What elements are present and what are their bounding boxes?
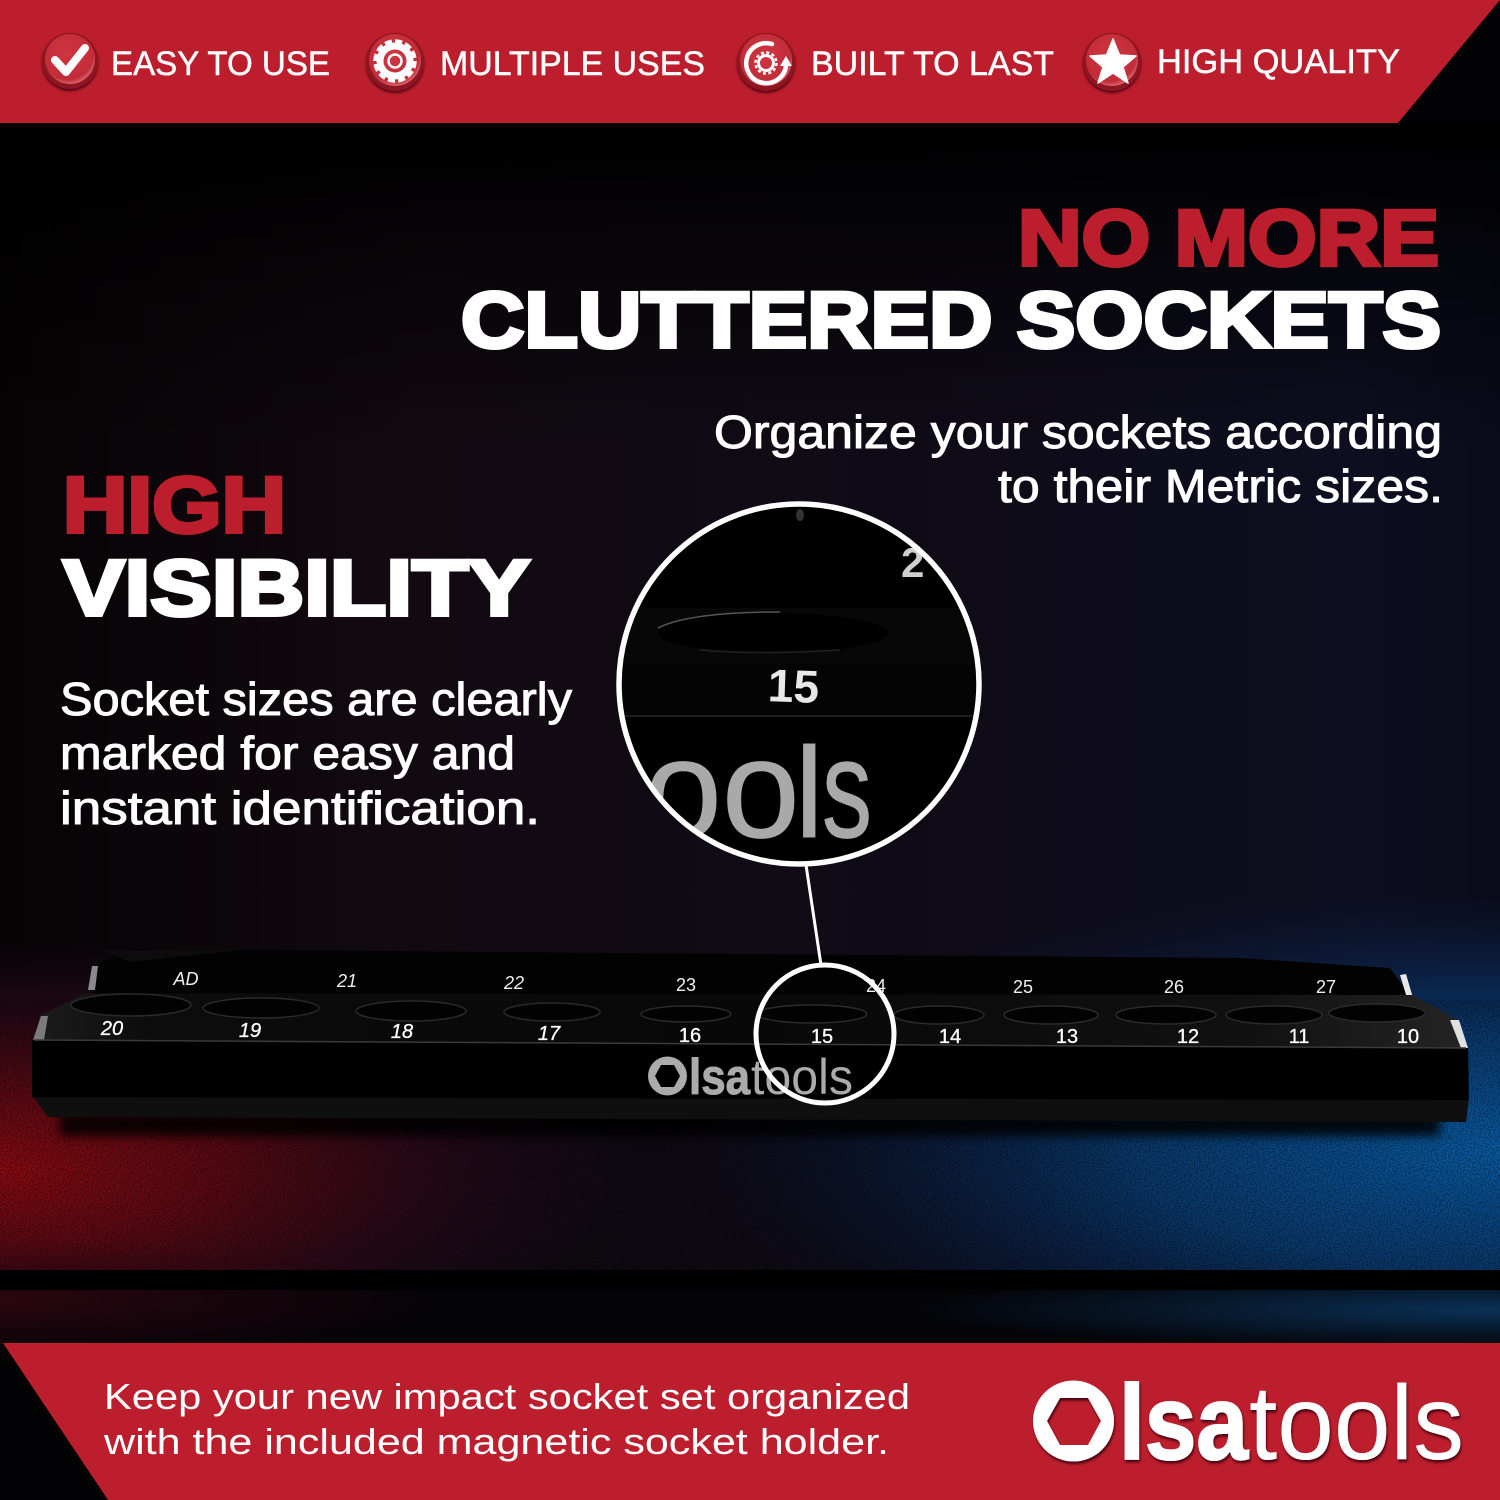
holder logo: lsa bbox=[689, 1049, 751, 1105]
rear row size numbers: 25 bbox=[1013, 977, 1033, 997]
holder base lip bbox=[32, 1095, 1469, 1122]
front row size numbers: 19 bbox=[239, 1020, 261, 1042]
heading: high visibility: HIGH bbox=[63, 460, 286, 549]
logo: Olsatools: lsa bbox=[1119, 1364, 1249, 1482]
text block: socket sizes bbox=[60, 673, 572, 834]
rear row size numbers: 21 bbox=[336, 971, 357, 991]
front row size numbers: 20 bbox=[100, 1018, 123, 1040]
icon: gear button bbox=[366, 33, 424, 91]
front row size numbers: 10 bbox=[1397, 1026, 1419, 1048]
callout: magnifier connector line bbox=[806, 865, 821, 965]
holder logo bbox=[648, 1049, 853, 1105]
text block: socket sizes: Socket sizes are clearly bbox=[60, 673, 572, 725]
label: built to last: BUILT TO LAST bbox=[811, 45, 1054, 83]
background photo scene bbox=[0, 203, 1500, 1352]
rear row size numbers: 26 bbox=[1164, 977, 1184, 997]
text block: footer tagline: with the included magnetic socket holder. bbox=[103, 1421, 889, 1462]
rear row size numbers: 23 bbox=[676, 975, 696, 995]
heading: no more cluttered sockets: CLUTTERED SOCKETS bbox=[461, 275, 1441, 364]
heading: no more cluttered sockets: NO MORE bbox=[1018, 193, 1439, 282]
rear row size numbers bbox=[172, 969, 1336, 997]
front row size numbers: 16 bbox=[679, 1025, 701, 1047]
heading: high visibility: VISIBILITY bbox=[63, 543, 530, 632]
feature: high quality bbox=[1083, 33, 1400, 91]
panel: bottom red banner bbox=[3, 1343, 1500, 1500]
callout: small target ring bbox=[756, 965, 894, 1103]
feature: easy to use bbox=[42, 33, 330, 89]
zoomed logo letters bbox=[652, 744, 869, 839]
front row size numbers: 18 bbox=[391, 1021, 413, 1043]
text block: footer tagline bbox=[103, 1376, 910, 1462]
callout: magnified lens bbox=[619, 504, 980, 867]
text block: organize sockets: to their Metric sizes. bbox=[998, 460, 1443, 512]
front row size numbers: 13 bbox=[1056, 1026, 1078, 1048]
rear row size numbers: 22 bbox=[503, 973, 524, 993]
front row size numbers bbox=[100, 1018, 1419, 1048]
zoomed logo letters: l bbox=[795, 722, 823, 865]
icon: star button bbox=[1083, 33, 1141, 91]
text block: organize sockets: Organize your sockets according bbox=[714, 406, 1442, 458]
label: easy to use: EASY TO USE bbox=[111, 45, 330, 83]
front row size numbers: 17 bbox=[538, 1023, 561, 1045]
front row size numbers: 14 bbox=[939, 1026, 961, 1048]
holder logo: tools bbox=[751, 1049, 853, 1105]
front row size numbers: 11 bbox=[1289, 1026, 1309, 1048]
zoomed size number: 15 bbox=[767, 659, 820, 713]
rear row size numbers: 24 bbox=[866, 976, 886, 996]
logo: Olsatools bbox=[1033, 1364, 1464, 1482]
rear row size numbers: AD bbox=[172, 969, 199, 989]
feature: built to last bbox=[737, 33, 1054, 91]
front row size numbers: 15 bbox=[811, 1026, 833, 1048]
label: high quality: HIGH QUALITY bbox=[1157, 43, 1400, 81]
holder top deck bbox=[34, 993, 1468, 1048]
heading: no more cluttered sockets bbox=[461, 193, 1441, 364]
socket holes bbox=[71, 994, 1425, 1024]
heading: high visibility bbox=[63, 460, 530, 632]
zoomed logo letters: oo bbox=[644, 710, 800, 867]
front row size numbers: 12 bbox=[1177, 1026, 1199, 1048]
label: multiple uses: MULTIPLE USES bbox=[440, 45, 705, 83]
icon: rotating gear button bbox=[737, 33, 795, 91]
rear row size numbers: 27 bbox=[1316, 977, 1336, 997]
text block: organize sockets bbox=[714, 406, 1443, 512]
callout: magnified lens: 2 bbox=[901, 539, 924, 586]
holder front face bbox=[32, 1040, 1469, 1100]
feature: multiple uses bbox=[366, 33, 705, 91]
text block: socket sizes: instant identification. bbox=[60, 782, 540, 834]
zoomed logo letters: s bbox=[822, 710, 872, 867]
holder rear shelf bbox=[92, 949, 1412, 1005]
panel: top red banner bbox=[0, 0, 1500, 123]
text block: socket sizes: marked for easy and bbox=[60, 727, 515, 779]
product: socket holder bbox=[32, 949, 1469, 1122]
logo: Olsatools: tools bbox=[1249, 1364, 1464, 1482]
text block: footer tagline: Keep your new impact socket set organized bbox=[104, 1376, 910, 1417]
icon: check mark button bbox=[42, 33, 98, 89]
